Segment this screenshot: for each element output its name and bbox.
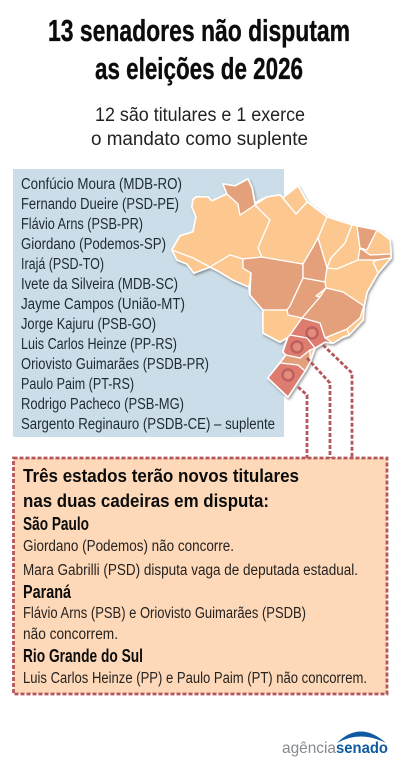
callout panel (14, 458, 387, 694)
state: Mato Grosso do Sul (263, 310, 302, 342)
state: Rio Grande do Sul (268, 363, 305, 397)
state: Rondônia (210, 255, 251, 287)
map of Brazil (172, 179, 391, 397)
senator list: Sargento Reginauro (PSDB-CE) – suplente (21, 416, 275, 433)
connector: São Paulo (323, 345, 352, 458)
state: Piauí (327, 225, 360, 269)
state: Espírito Santo (347, 306, 364, 335)
state: Amapá (283, 186, 307, 214)
logo: Agência Senado: agência (282, 740, 336, 757)
state: Paraná (283, 335, 315, 358)
states: Rio Grande do Norte and Paraíba (360, 230, 391, 255)
senator list: Jayme Campos (União-MT) (21, 296, 185, 313)
state: Santa Catarina (280, 350, 310, 371)
subtitle: 12 são titulares e 1 exerce (95, 105, 305, 126)
section: São Paulo: Mara Gabrilli (PSD) disputa vaga de deputada estadual. (23, 562, 358, 579)
panel: senator list background (13, 169, 284, 437)
senator list: Fernando Dueire (PSD-PE) (21, 196, 179, 213)
title: as eleições de 2026 (95, 51, 303, 86)
section: Paraná: Flávio Arns (PSB) e Oriovisto Guimarães (PSDB) (23, 605, 306, 622)
section: São Paulo (23, 514, 358, 579)
state: Tocantins (303, 238, 327, 282)
state: Ceará (357, 226, 377, 250)
senator list: Luis Carlos Heinze (PP-RS) (21, 336, 177, 353)
subtitle (91, 105, 308, 150)
marker: São Paulo (306, 328, 318, 338)
senator list: Rodrigo Pacheco (PSB-MG) (21, 396, 184, 413)
senator list: Irajá (PSD-TO) (21, 256, 104, 273)
states: Alagoas and Sergipe (373, 258, 391, 273)
state: Mato Grosso (243, 257, 303, 310)
subtitle: o mandato como suplente (91, 129, 308, 150)
section: São Paulo: Giordano (Podemos) não concorre. (23, 538, 234, 555)
senator list: Ivete da Silveira (MDB-SC) (21, 276, 178, 293)
state: Goiás (287, 278, 326, 318)
senator list: Flávio Arns (PSB-PR) (21, 216, 143, 233)
marker: Paraná (292, 342, 302, 352)
state: Pernambuco (358, 248, 391, 260)
map silhouette with shadow (172, 179, 391, 397)
marker: Rio Grande do Sul (282, 370, 294, 380)
logo: Agência Senado (282, 732, 388, 757)
section: São Paulo: São Paulo (23, 514, 89, 534)
connector: Rio Grande do Sul (298, 387, 307, 458)
state: São Paulo (290, 318, 333, 348)
senator list (21, 176, 275, 433)
state: Acre (172, 250, 210, 273)
state: Roraima (223, 179, 255, 215)
connector: Paraná (307, 358, 330, 458)
logo: Agência Senado: senado (336, 740, 388, 757)
state: Minas Gerais (302, 288, 364, 338)
senator list: Oriovisto Guimarães (PSDB-PR) (21, 356, 209, 373)
callout heading: Três estados terão novos titulares (23, 466, 299, 486)
section: Rio Grande do Sul (23, 646, 367, 687)
state: Bahia (325, 260, 378, 306)
senator list: Confúcio Moura (MDB-RO) (21, 176, 182, 193)
senator list: Giordano (Podemos-SP) (21, 236, 166, 253)
section: Paraná (23, 582, 306, 643)
state: Maranhão (318, 217, 352, 268)
section: Paraná: não concorrem. (23, 626, 118, 643)
senator list: Paulo Paim (PT-RS) (21, 376, 134, 393)
callout heading (23, 466, 299, 511)
state: Pará (255, 195, 327, 264)
callout heading: nas duas cadeiras em disputa: (23, 491, 269, 511)
state: Amazonas (172, 194, 270, 267)
section: Paraná: Paraná (23, 582, 72, 602)
senator list: Jorge Kajuru (PSB-GO) (21, 316, 156, 333)
section: Rio Grande do Sul: Rio Grande do Sul (23, 646, 143, 666)
state: Rio de Janeiro (325, 329, 349, 343)
title (48, 13, 350, 86)
